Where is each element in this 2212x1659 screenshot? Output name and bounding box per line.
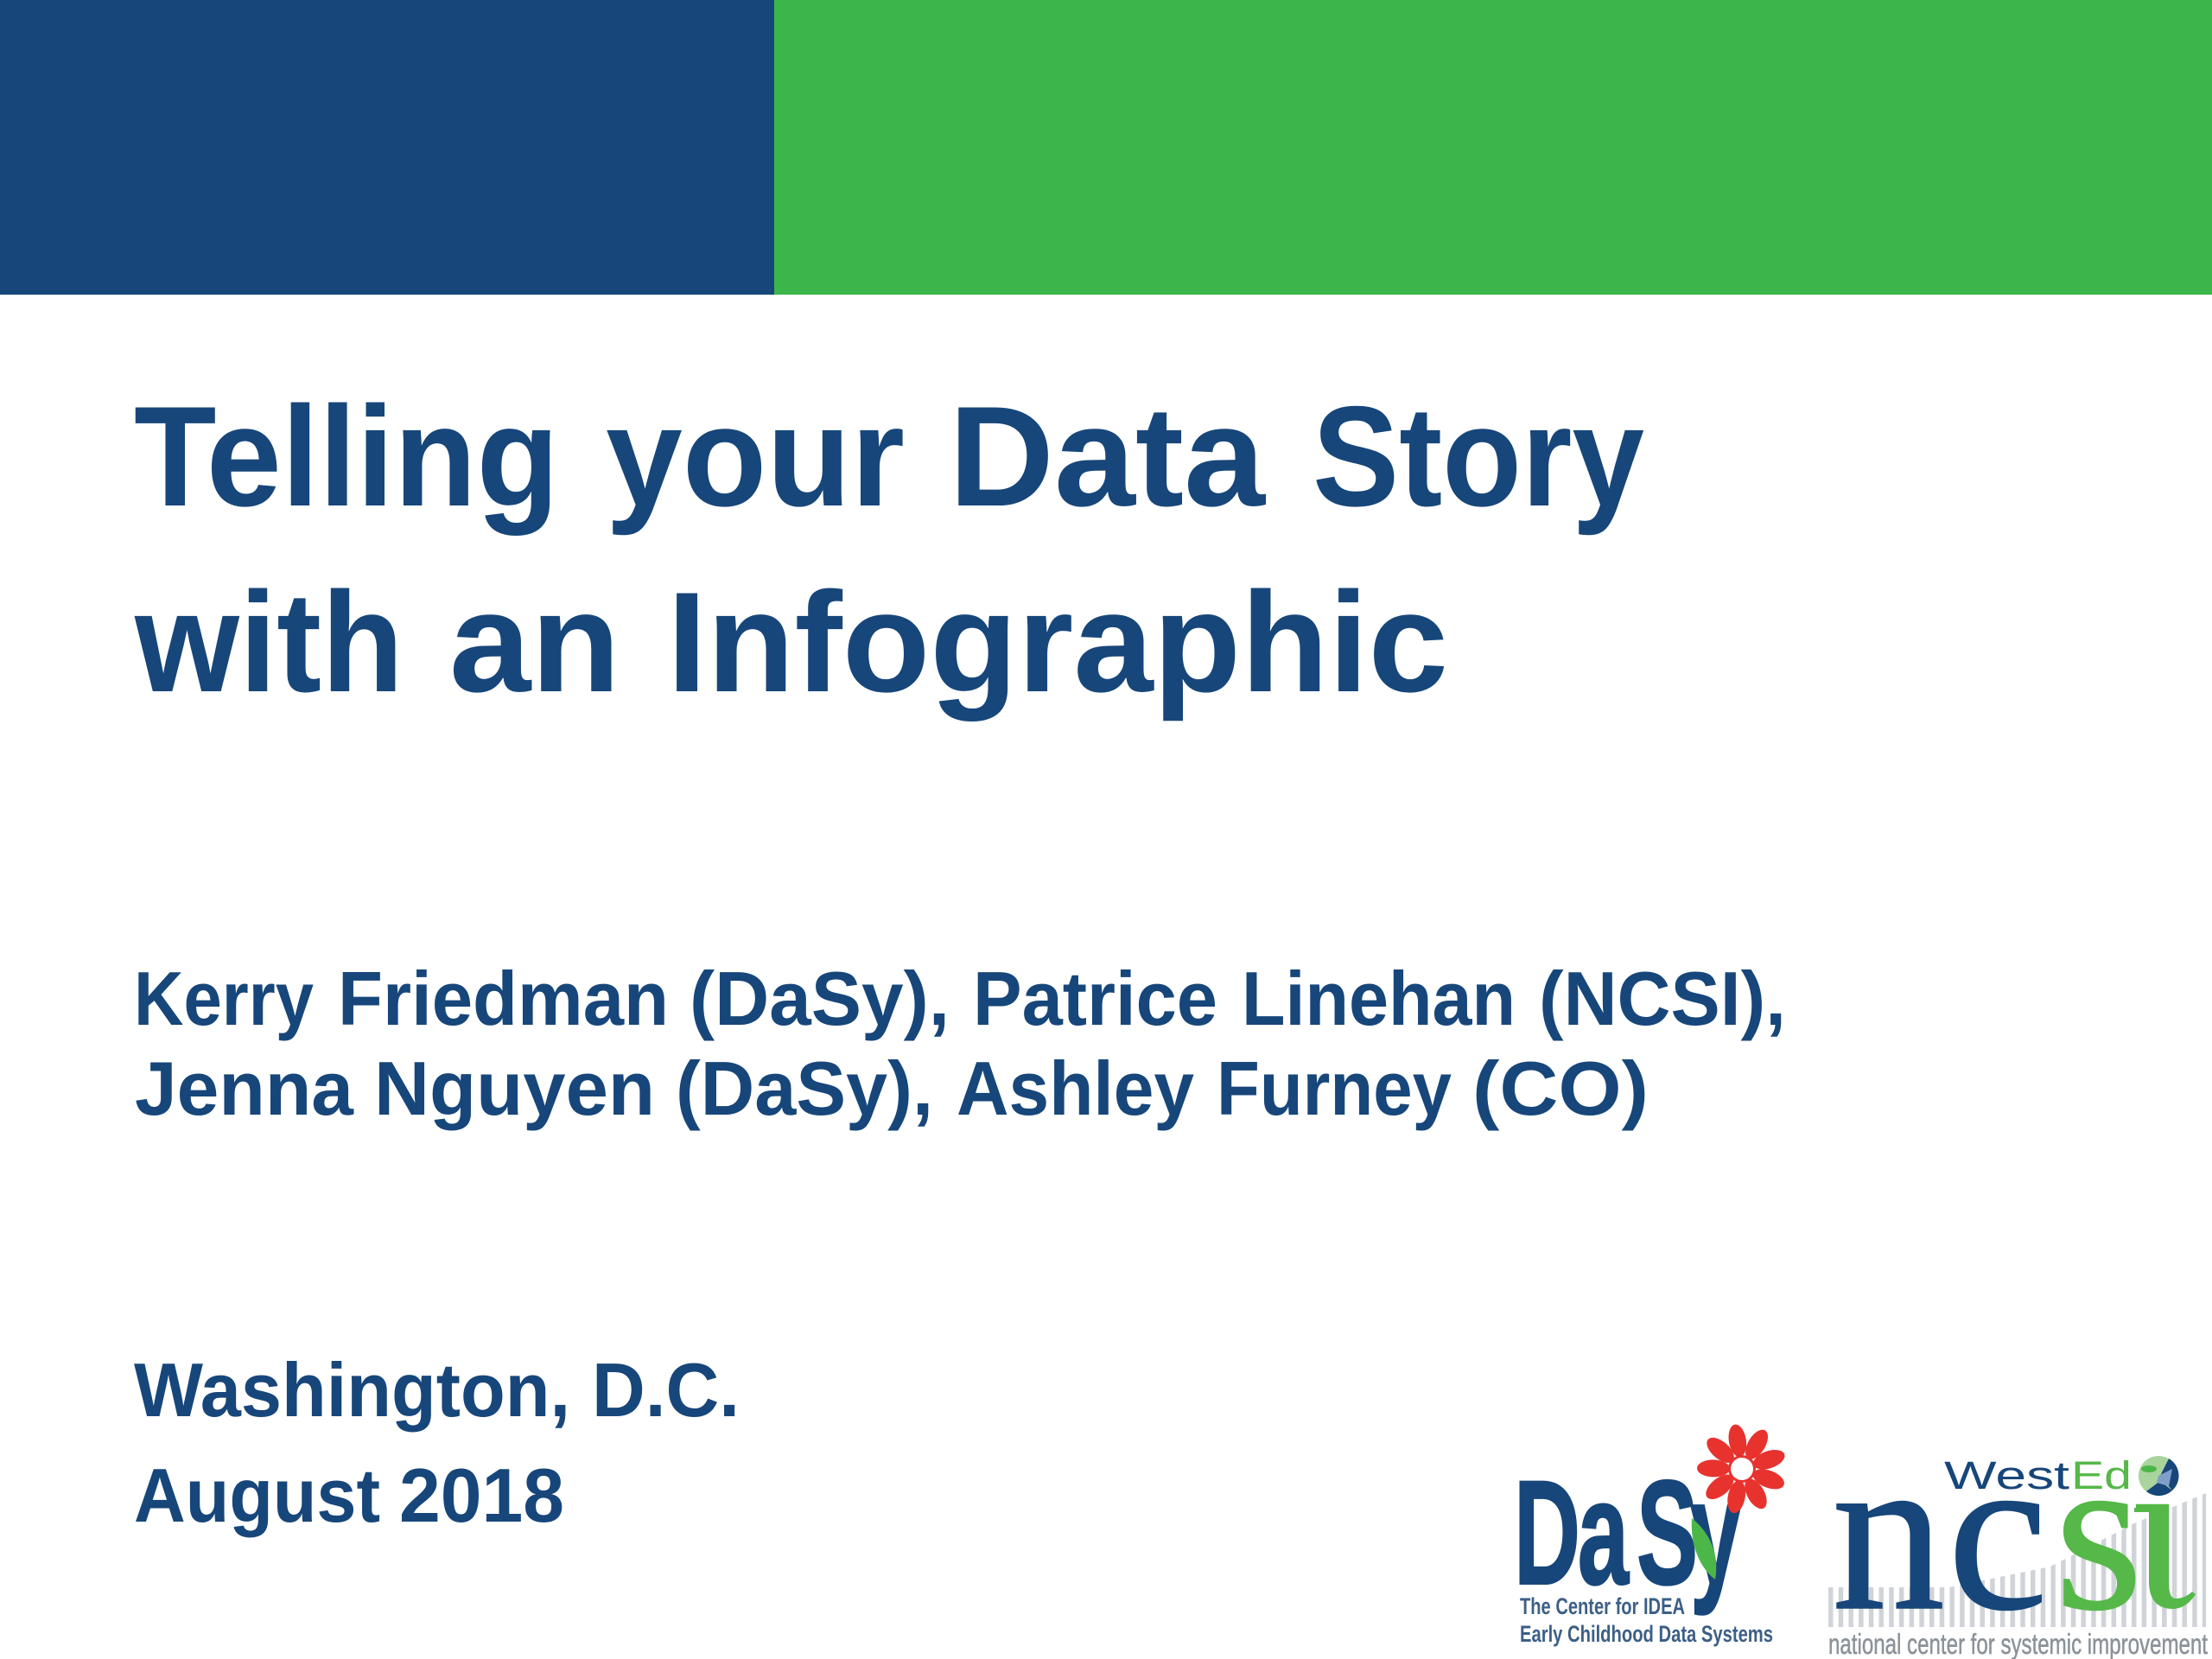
DaSy logo xyxy=(1514,1417,1794,1647)
NCSI wordmark: ncs xyxy=(1832,1407,2143,1657)
icon: WestEd globe xyxy=(2139,1456,2179,1496)
icon: green leaf xyxy=(1692,1518,1716,1580)
presenters: Ashley xyxy=(957,1046,1194,1131)
DaSy tagline: The Center for IDEA xyxy=(1520,1593,1685,1619)
presenters: (DaSy), xyxy=(676,1046,933,1131)
header band: green block xyxy=(774,0,2212,295)
title: with xyxy=(134,563,404,721)
presenters: Linehan xyxy=(1242,956,1516,1041)
title: Story xyxy=(1313,377,1644,536)
WestEd wordmark xyxy=(1944,1453,2132,1497)
location: Washington, xyxy=(134,1347,570,1433)
icon: red flower xyxy=(1690,1417,1794,1521)
date: 2018 xyxy=(399,1452,564,1538)
presenters: Furney xyxy=(1217,1046,1452,1131)
DaSy tagline: Early Childhood Data Systems xyxy=(1520,1621,1773,1647)
presenters: (NCSI), xyxy=(1539,956,1786,1041)
bars backdrop xyxy=(1828,1493,2206,1627)
header band: blue block xyxy=(0,0,774,295)
WestEd wordmark: West xyxy=(1944,1453,2070,1497)
title: Telling xyxy=(134,377,559,536)
NCSI wordmark xyxy=(1836,1500,2196,1611)
title: Infographic xyxy=(667,563,1448,721)
presenters xyxy=(134,956,1786,1131)
presenters: (CO) xyxy=(1472,1046,1649,1131)
presenters: Nguyen xyxy=(374,1046,655,1131)
DaSy wordmark: DaSy xyxy=(1514,1450,1741,1616)
NCSI wordmark: i xyxy=(2128,1407,2191,1657)
title xyxy=(134,377,1644,721)
WestEd and NCSI logo xyxy=(1828,1456,2208,1659)
title: Data xyxy=(949,377,1266,536)
presenters: Kerry xyxy=(134,956,314,1041)
presenters: Patrice xyxy=(973,956,1217,1041)
date xyxy=(134,1452,564,1538)
presenters: (DaSy), xyxy=(690,956,950,1041)
presenters: Jenna xyxy=(135,1046,354,1131)
date: August xyxy=(134,1452,380,1538)
title: your xyxy=(606,377,905,536)
presenters: Friedman xyxy=(338,956,669,1041)
title: an xyxy=(449,563,620,721)
WestEd wordmark: Ed xyxy=(2071,1453,2132,1497)
DaSy tagline xyxy=(1520,1593,1773,1647)
location: D.C. xyxy=(592,1347,740,1433)
